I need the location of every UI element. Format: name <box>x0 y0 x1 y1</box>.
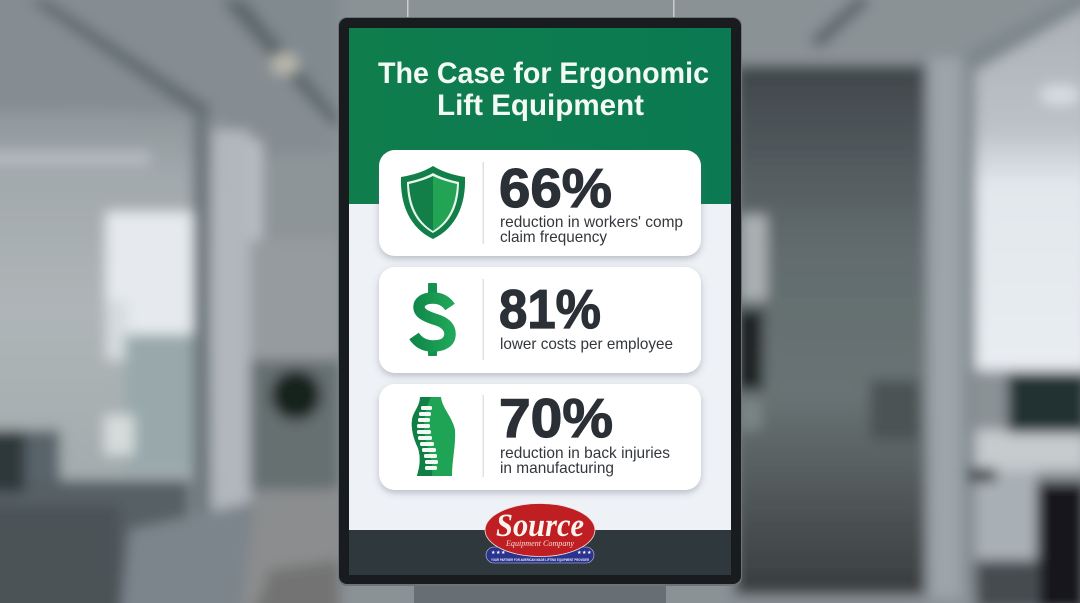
plant <box>271 370 321 420</box>
logo blue banner <box>486 547 594 563</box>
card: 70% back injuries <box>379 384 701 490</box>
stat description: reduction in back injuries <box>500 445 670 462</box>
stand <box>414 585 666 603</box>
monitor and desk <box>968 373 1080 603</box>
right ceiling strip <box>810 0 870 48</box>
logo wordmark: Source <box>496 508 584 544</box>
stat: 70%: 70% <box>499 387 613 449</box>
poster screen <box>349 28 731 575</box>
logo blue banner: ★★★ <box>491 550 506 556</box>
stat: 66%: 66% <box>499 157 612 219</box>
left column and pillar <box>193 112 262 532</box>
icon: shield <box>401 166 465 239</box>
dark footer band <box>349 530 731 575</box>
hanging cables <box>407 0 674 18</box>
divider <box>482 279 484 360</box>
stat description <box>500 214 683 246</box>
logo: Source Equipment Company <box>485 504 595 563</box>
stat description: lower costs per employee <box>500 336 673 353</box>
left glass wall <box>0 0 340 520</box>
title: The Case for Ergonomic <box>378 57 709 90</box>
divider <box>482 395 484 477</box>
title <box>378 57 709 122</box>
stat description: reduction in workers' comp <box>500 214 683 231</box>
card: 66% workers' comp <box>379 150 701 256</box>
left window <box>104 212 196 470</box>
icon: dollar sign <box>414 283 450 356</box>
logo red oval <box>485 504 595 556</box>
icon: spine <box>412 397 455 476</box>
right dark panel <box>735 65 925 595</box>
title: Lift Equipment <box>437 89 644 122</box>
logo blue banner: YOUR PARTNER FOR AMERICAN MADE LIFTING EQUIPMENT PROVIDER <box>491 558 589 562</box>
logo tagline: Equipment Company <box>505 539 574 548</box>
right pillar <box>930 58 962 598</box>
green header band <box>349 28 731 204</box>
poster frame <box>338 17 742 586</box>
right wall behind plant <box>250 155 340 490</box>
stat description <box>500 445 670 477</box>
divider <box>482 162 484 244</box>
card: 81% costs <box>379 267 701 373</box>
right window <box>962 0 1080 590</box>
logo blue banner: ★★★ <box>577 550 592 556</box>
stat description: claim frequency <box>500 229 607 246</box>
glow on panel and dark shape <box>735 215 920 440</box>
stat: 81%: 81% <box>499 278 601 340</box>
left ceiling beams <box>28 0 340 130</box>
stat description: in manufacturing <box>500 460 614 477</box>
floor left <box>0 430 340 603</box>
